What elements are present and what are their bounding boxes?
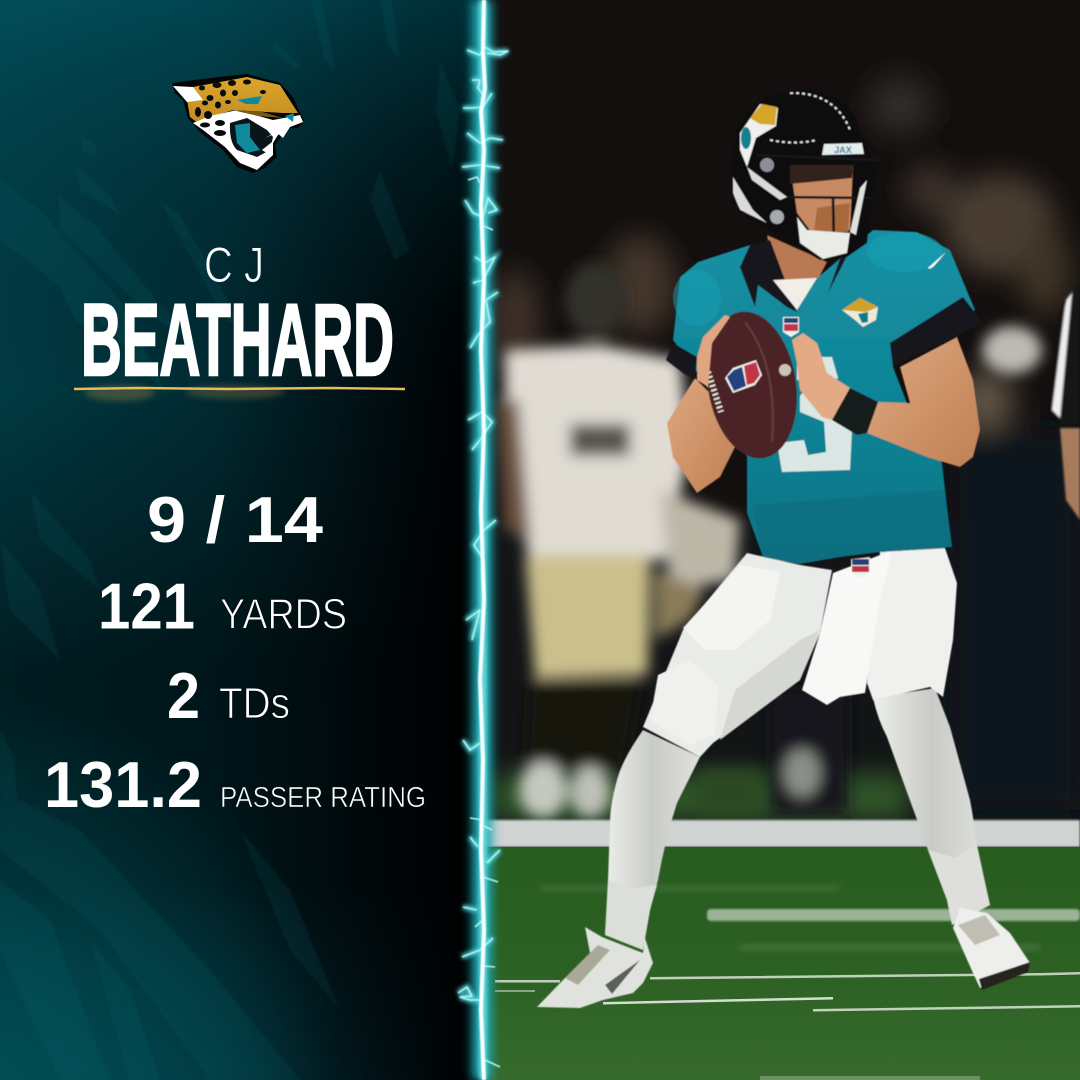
head fur [187, 77, 298, 127]
palm frond texture [0, 0, 460, 1080]
helmet side stripes [733, 158, 787, 224]
visor strip JAX [822, 143, 864, 155]
player name [74, 237, 405, 401]
helmet shine [770, 93, 850, 142]
turf field [484, 820, 1080, 1080]
jersey number 3 [777, 357, 852, 472]
right sleeve band [890, 297, 983, 367]
chin guard [797, 217, 850, 259]
photo background: blurred stadium [470, 0, 1080, 1080]
undershirt [773, 278, 817, 310]
right collar piping [828, 250, 850, 293]
sideline stripe [484, 820, 1080, 847]
stat: yards: 121 [98, 570, 195, 642]
visor strip JAX: JAX [834, 145, 852, 155]
chest logo jaguar [842, 298, 878, 327]
white pants: left thigh [643, 553, 832, 757]
left sleeve band [666, 343, 697, 380]
hand towel [802, 550, 893, 705]
blurred cap in crowd [982, 326, 1042, 374]
nose [285, 113, 294, 122]
gold underline [74, 385, 405, 401]
left forearm [667, 378, 735, 493]
front leg: viewer's right [873, 688, 990, 925]
stat: touchdowns: TDs [219, 679, 290, 728]
right mask strip [850, 180, 867, 235]
facemask bars [757, 155, 877, 246]
referee at right edge [1050, 285, 1080, 520]
quarterback [537, 90, 1030, 1008]
white pants: right thigh [867, 548, 957, 700]
eye [237, 96, 262, 104]
NFL waist shield [851, 557, 870, 578]
throwing hand [697, 315, 730, 387]
ear [173, 86, 203, 102]
stat: yards [98, 570, 347, 642]
brow [232, 110, 283, 118]
stat: passer rating: PASSER RATING [220, 782, 426, 814]
stat: passer rating: 131.2 [44, 748, 202, 821]
helmet [732, 90, 877, 260]
back leg: viewer's left [605, 730, 700, 950]
blurred crowd [490, 75, 1080, 820]
surname: BEATHARD [81, 283, 394, 397]
wristband [832, 388, 878, 435]
inner glow [458, 0, 508, 1080]
stat: completions: 9 / 14 [147, 483, 323, 556]
stat: passer rating [44, 748, 426, 821]
stat: touchdowns: 2 [167, 659, 200, 732]
first name: C J [204, 237, 264, 293]
chest shield NFL [783, 317, 799, 337]
spots [195, 80, 266, 136]
stat: yards: YARDS [220, 590, 347, 638]
bolt core [480, 0, 485, 1080]
collar [740, 240, 797, 312]
jersey [666, 230, 983, 564]
right cleat [953, 908, 1030, 990]
fangs [262, 127, 290, 155]
left panel [0, 0, 480, 1080]
left cleat [537, 927, 653, 1008]
right arm [867, 337, 980, 467]
yard markings [495, 885, 1080, 1080]
ball NFL shield [725, 360, 762, 393]
neck [767, 235, 827, 285]
outer glow [472, 0, 492, 1080]
guide hand [792, 333, 850, 420]
mouth with tongue [230, 118, 273, 157]
helmet logo [740, 104, 778, 167]
bolt spurs [458, 47, 508, 1067]
swoosh [928, 252, 946, 269]
lightning border [458, 0, 508, 1080]
football [697, 305, 807, 465]
team logo: jaguar head [172, 74, 304, 173]
face [790, 165, 853, 233]
stat: touchdowns [167, 659, 290, 732]
muzzle [193, 110, 303, 170]
blurred opposing player [496, 262, 848, 818]
